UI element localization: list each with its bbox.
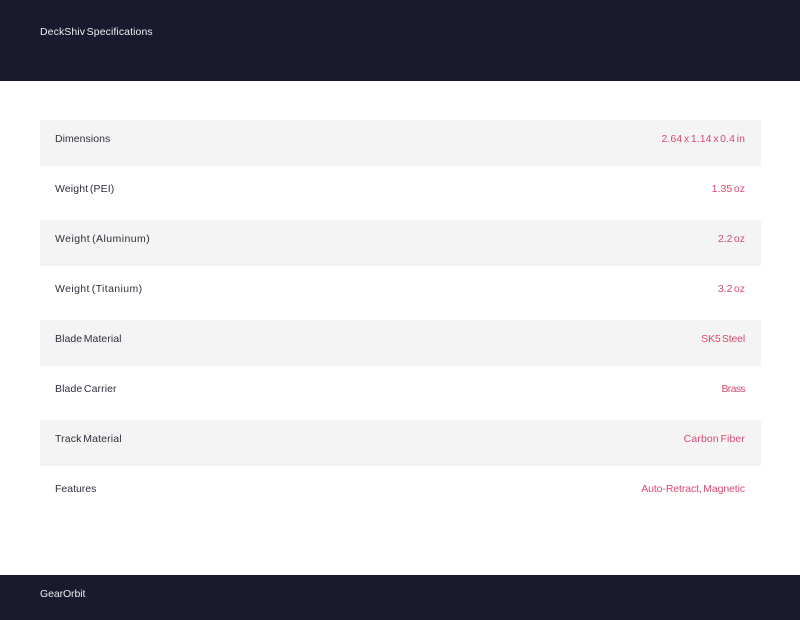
row: weight titanium [55, 283, 745, 295]
row: blade material: Blade Material [55, 333, 122, 345]
header [0, 0, 800, 81]
footer brand: GearOrbit [40, 588, 85, 600]
row: dimensions: 2.64 x 1.14 x 0.4 in [661, 133, 745, 145]
panel: specifications table [40, 120, 761, 495]
row: weight aluminum: 2.2 oz [718, 233, 745, 245]
row: weight aluminum [40, 220, 761, 266]
row: weight PEI [55, 183, 745, 195]
row: track material: Track Material [55, 433, 122, 445]
row: features: Auto-Retract, Magnetic [641, 483, 745, 495]
row: weight PEI: Weight (PEI) [55, 183, 114, 195]
row: weight titanium: Weight (Titanium) [55, 283, 143, 295]
row: features: Features [55, 483, 96, 495]
row: weight PEI: 1.35 oz [712, 183, 745, 195]
row: blade material [40, 320, 761, 366]
row: weight aluminum: Weight (Aluminum) [55, 233, 150, 245]
row: blade carrier [55, 383, 746, 395]
row: track material [40, 420, 761, 466]
row: blade material: SK5 Steel [701, 333, 745, 345]
footer [0, 575, 800, 620]
row: weight titanium: 3.2 oz [718, 283, 745, 295]
row: blade carrier: Brass [721, 383, 745, 395]
row: features [55, 483, 745, 495]
row: dimensions: Dimensions [55, 133, 110, 145]
row: blade carrier: Blade Carrier [55, 383, 117, 395]
title: DeckShiv Specifications [40, 26, 153, 38]
row: track material: Carbon Fiber [684, 433, 745, 445]
row: dimensions [40, 120, 761, 166]
